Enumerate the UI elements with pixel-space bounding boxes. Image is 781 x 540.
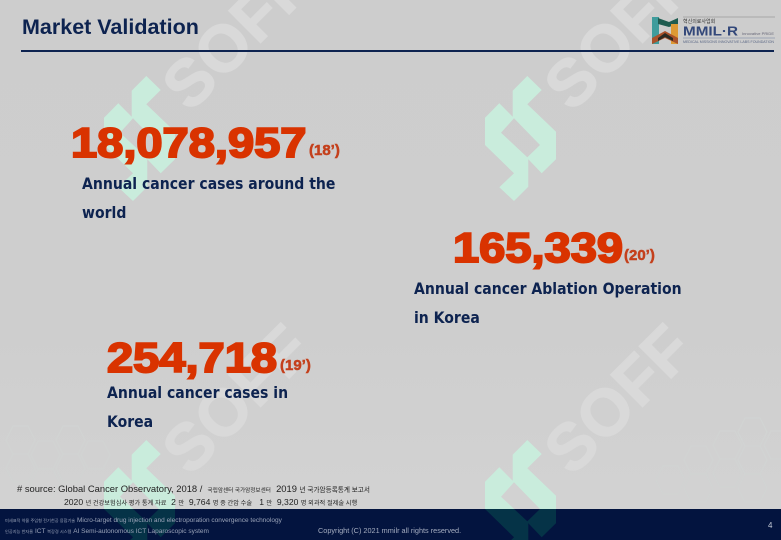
- footer technology lines: 인공지능 반자율 ICT 복강경 시스템 AI Semi-autonomous ICT Laparoscopic system: [5, 528, 209, 534]
- number: 254,718: 254,718: [107, 334, 277, 380]
- number: 165,339: 165,339: [453, 224, 623, 270]
- label: Korea cases: Annual cancer cases in: [107, 384, 288, 402]
- number: 18,078,957: 18,078,957: [71, 118, 306, 166]
- page number: 4: [768, 521, 772, 530]
- label: Korea cases: Korea: [107, 413, 153, 431]
- source note: 2020 년 건강보험심사 평가 통계 자료 2 만 9,764 명 중 간암 수술 1 만 9,320 명 외과적 절제술 시행: [64, 497, 357, 507]
- title: Market Validation: [22, 15, 199, 39]
- title rule: [21, 50, 774, 52]
- logo: MMIL-R: [652, 16, 775, 44]
- footer technology lines: [5, 516, 282, 534]
- logo: MMIL-R: Innovative PRIDE: [742, 31, 774, 36]
- background watermarks: SOFF: [530, 311, 706, 487]
- source note: [17, 483, 370, 507]
- label: ablation operations: Annual cancer Ablation Operation: [414, 280, 682, 298]
- year: 18: (18’): [309, 142, 340, 159]
- stat: world cases: [71, 118, 340, 222]
- label: world cases: world: [82, 204, 126, 222]
- logo: MMIL-R: MMIL·R: [683, 24, 739, 38]
- background watermarks: SOFF: [148, 311, 324, 487]
- label: world cases: [82, 175, 335, 222]
- year: 20: (20’): [624, 247, 655, 264]
- source note: # source: Global Cancer Observatory, 2018 / 국립암센터 국가암정보센터 2019 년 국가암등록통계 보고서: [17, 483, 370, 494]
- stat: Korea cases: [107, 334, 311, 431]
- footer bar: [0, 509, 781, 540]
- label: ablation operations: [414, 280, 682, 327]
- label: ablation operations: in Korea: [414, 309, 480, 327]
- label: Korea cases: [107, 384, 288, 431]
- footer technology lines: 미세표적 약물 주입형 전기천공 융합기술 Micro-target drug injection and electroporation convergence technology: [5, 516, 282, 524]
- logo: MMIL-R: 혁신의료사업회: [683, 18, 715, 25]
- stat: ablation operations: [414, 224, 682, 327]
- year: 19: (19’): [280, 357, 311, 374]
- label: world cases: Annual cancer cases around the: [82, 175, 335, 193]
- copyright: Copyright (C) 2021 mmilr all rights reserved.: [318, 526, 461, 535]
- logo: MMIL-R: MEDICAL MISSIONS INNOVATIVE LABS FOUNDATION: [683, 40, 774, 44]
